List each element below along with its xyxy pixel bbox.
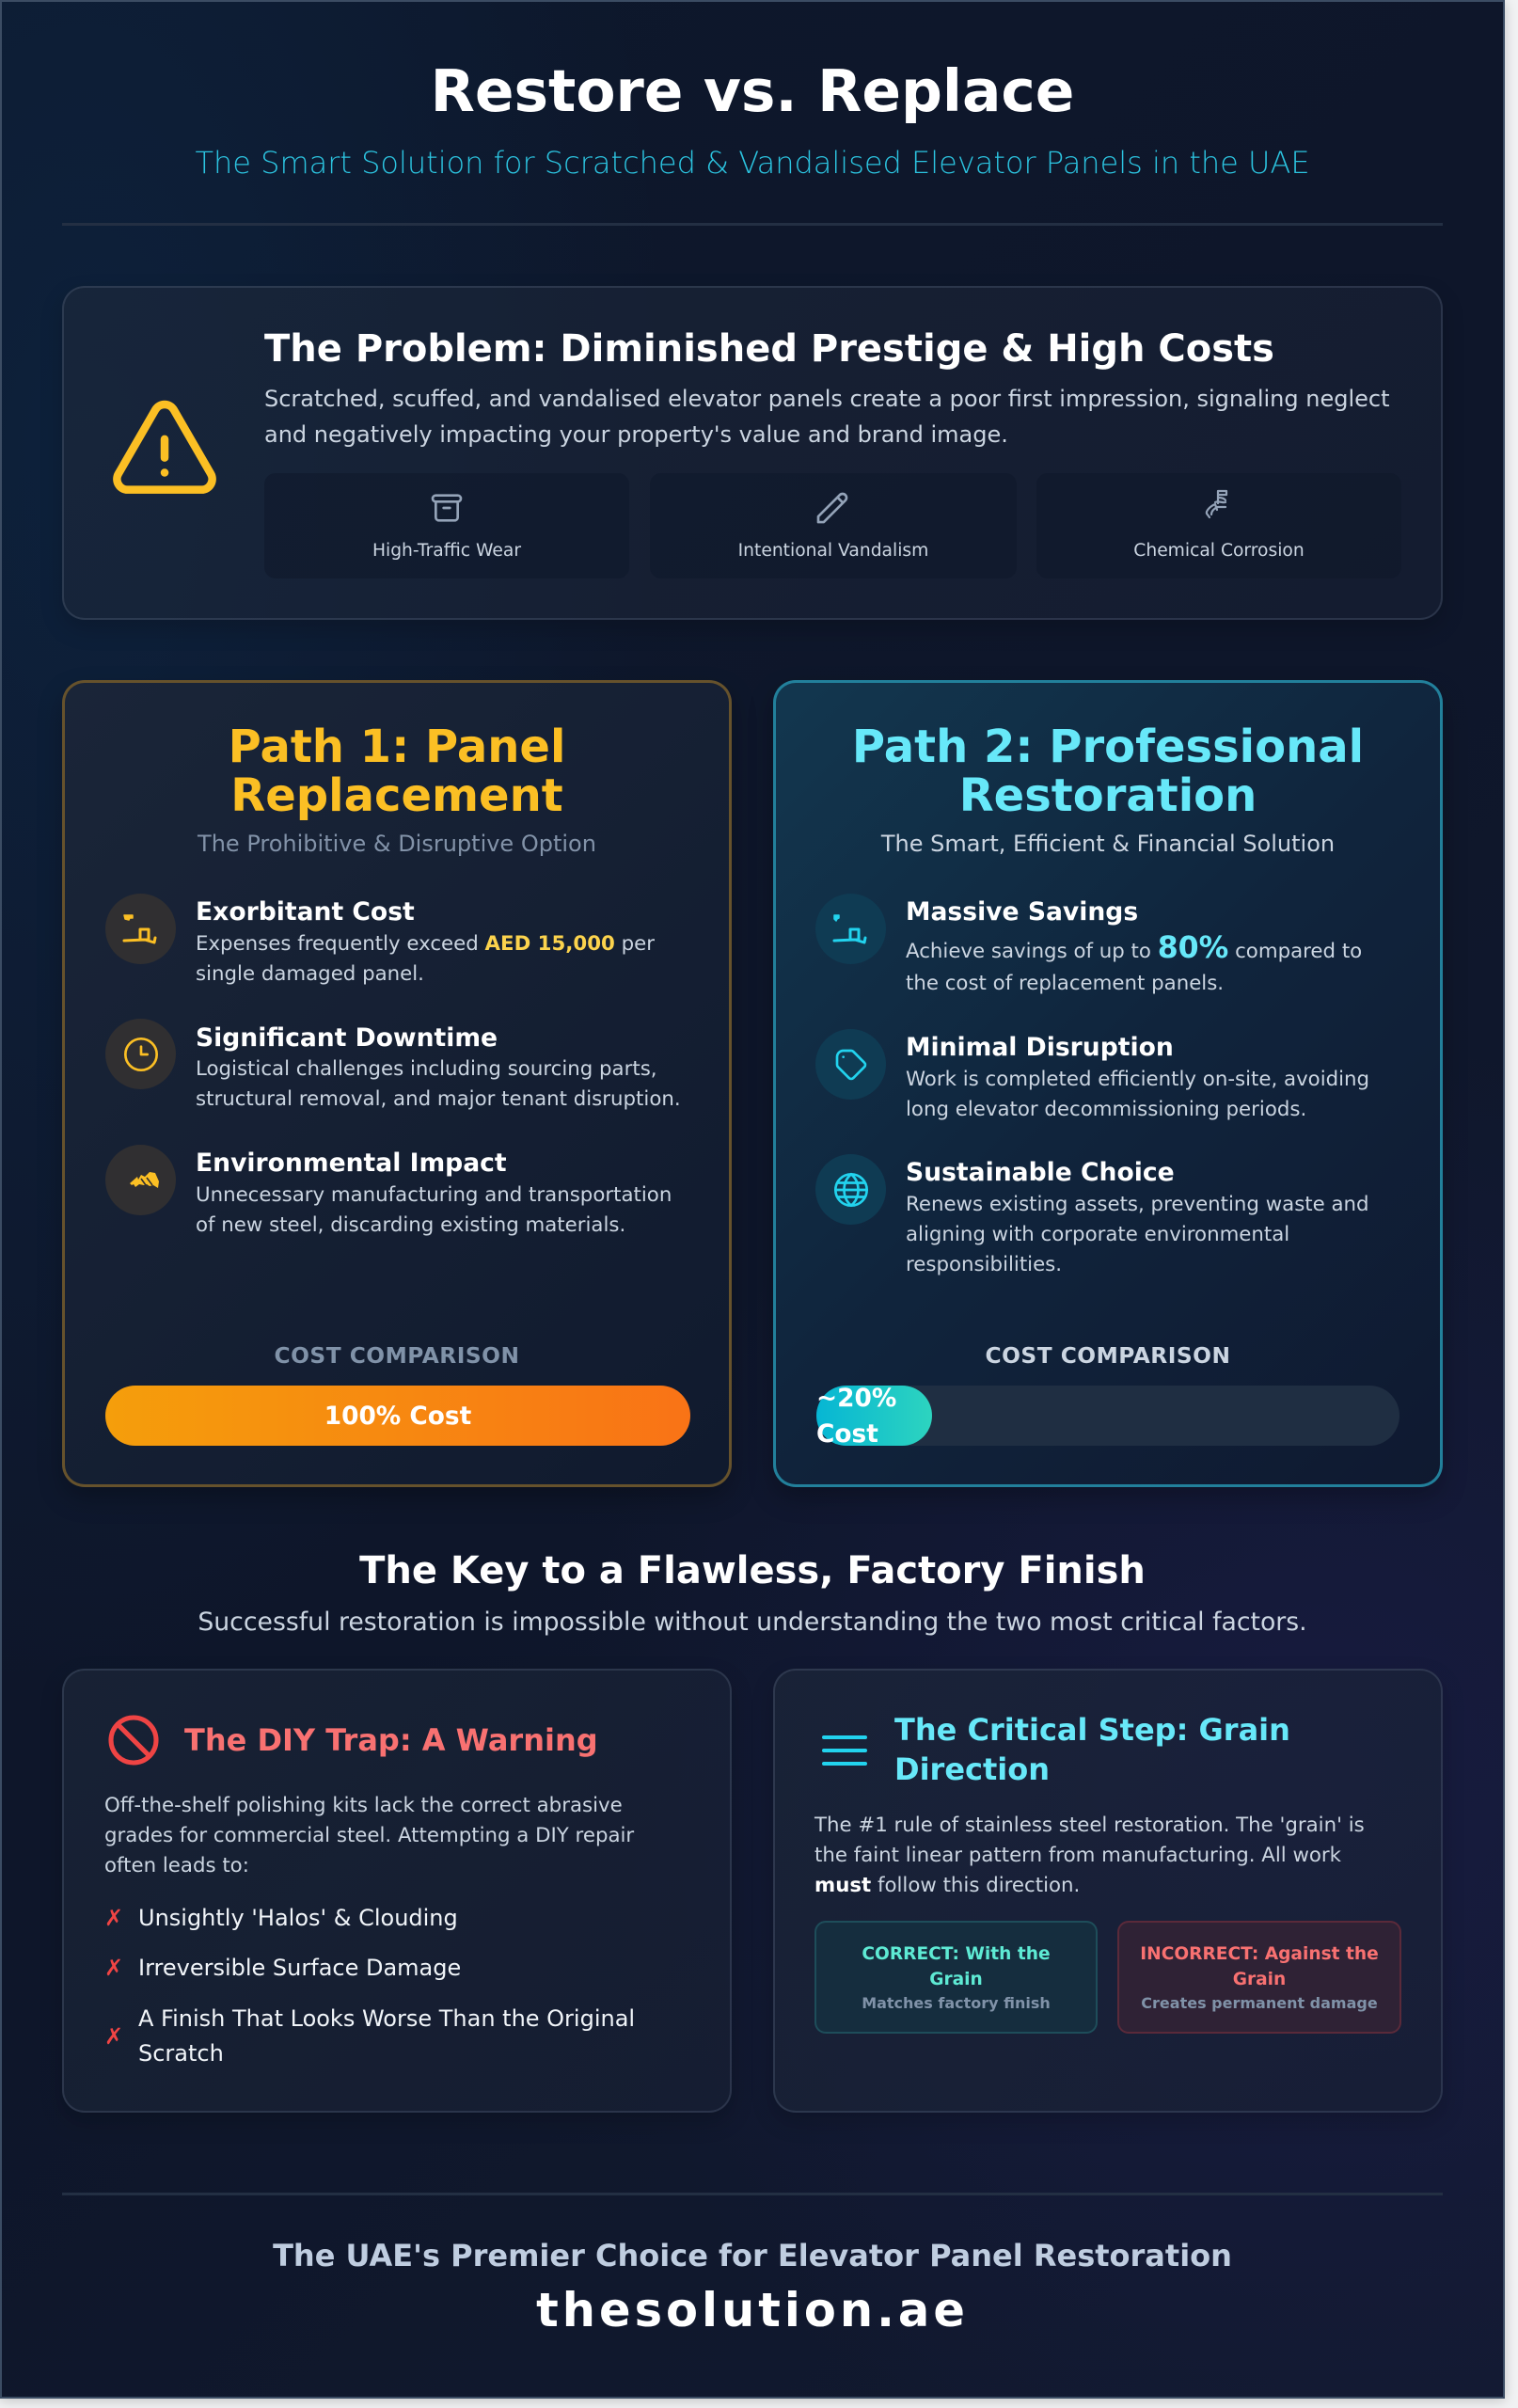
icon: tag [815, 1029, 886, 1100]
cost comparison label: COST COMPARISON [275, 1343, 519, 1369]
DIY description [104, 1794, 634, 1877]
grain heading: The Critical Step: Grain [894, 1712, 1290, 1748]
icon: savings [815, 894, 886, 964]
correct label: Grain [929, 1970, 983, 1988]
bar label: Cost [816, 1419, 878, 1449]
cross mark: ✗ [104, 2023, 123, 2050]
description [906, 931, 1362, 995]
title: Significant Downtime [196, 1023, 498, 1053]
description: the cost of replacement panels. [906, 972, 1224, 995]
icon: archive box [431, 494, 463, 522]
DIY description: often leads to: [104, 1854, 249, 1877]
description: Expenses frequently exceed AED 15,000 per [196, 932, 655, 956]
icon: globe [815, 1154, 886, 1225]
description: Logistical challenges including sourcing parts, [196, 1057, 657, 1081]
path 2 heading: Restoration [959, 769, 1257, 822]
description [196, 1057, 681, 1111]
chip: chemical corrosion [1036, 473, 1401, 578]
description [906, 1193, 1369, 1276]
bullet text: Scratch [138, 2040, 224, 2067]
title: Minimal Disruption [906, 1033, 1174, 1062]
path 2 heading: Path 2: Professional [852, 721, 1364, 773]
problem heading: The Problem: Diminished Prestige & High Costs [264, 327, 1274, 371]
panel: the problem [62, 286, 1443, 620]
path 2 heading [852, 721, 1364, 822]
incorrect label: Grain [1233, 1970, 1286, 1988]
description [196, 932, 655, 986]
icon: pencil [816, 493, 848, 523]
chip: high-traffic wear [264, 473, 629, 578]
description: Renews existing assets, preventing waste and [906, 1193, 1369, 1216]
bar label: ~20% [816, 1384, 896, 1413]
label: Chemical Corrosion [1133, 541, 1305, 561]
problem description [264, 386, 1389, 448]
bar: 100% cost: 100% Cost [324, 1402, 471, 1431]
DIY heading: The DIY Trap: A Warning [184, 1722, 598, 1758]
grain description: the faint linear pattern from manufacturing. All work [814, 1844, 1341, 1867]
footer brand: thesolution.ae [536, 2283, 969, 2337]
grain description: The #1 rule of stainless steel restoration. The 'grain' is [814, 1814, 1365, 1837]
title: Massive Savings [906, 897, 1138, 927]
grain description: must follow this direction. [814, 1874, 1080, 1897]
description: aligning with corporate environmental [906, 1223, 1289, 1246]
problem description: Scratched, scuffed, and vandalised elevator panels create a poor first impression, signaling neglect [264, 386, 1389, 412]
item: minimal disruption [815, 1029, 1369, 1121]
incorrect note: Creates permanent damage [1141, 1994, 1378, 2012]
grain heading: Direction [894, 1751, 1050, 1787]
problem description: and negatively impacting your property's value and brand image. [264, 421, 1008, 448]
footer tagline: The UAE's Premier Choice for Elevator Panel Restoration [273, 2238, 1232, 2273]
description: structural removal, and major tenant disruption. [196, 1087, 681, 1111]
section heading: The Key to a Flawless, Factory Finish [359, 1549, 1146, 1592]
subtitle: The Smart Solution for Scratched & Vandalised Elevator Panels in the UAE [195, 145, 1310, 181]
icon: ban [108, 1716, 159, 1765]
description: responsibilities. [906, 1253, 1062, 1276]
icon: clock [105, 1019, 176, 1089]
bar fill [816, 1386, 932, 1446]
incorrect label: INCORRECT: Against the [1140, 1944, 1379, 1964]
title: Restore vs. Replace [431, 58, 1074, 125]
description: Work is completed efficiently on-site, avoiding [906, 1068, 1369, 1091]
icon: environment [105, 1145, 176, 1215]
icon: cost [105, 894, 176, 964]
panel: path 1 replacement [62, 680, 732, 1487]
bullet: halos: ✗ [104, 1905, 123, 1931]
description [906, 1068, 1369, 1121]
panel: grain direction [773, 1669, 1443, 2113]
section subtitle: Successful restoration is impossible without understanding the two most critical factors. [198, 1608, 1307, 1637]
bar label [816, 1384, 896, 1449]
chip: intentional vandalism [650, 473, 1017, 578]
label: High-Traffic Wear [372, 541, 521, 561]
bullet: irreversible damage: ✗ [104, 1955, 123, 1981]
description: Achieve savings of up to 80% compared to [906, 931, 1362, 965]
bullet: irreversible damage: Irreversible Surface Damage [138, 1955, 461, 1981]
item: sustainable choice [815, 1154, 1369, 1276]
bullet: halos: Unsightly 'Halos' & Clouding [138, 1905, 458, 1931]
title: Environmental Impact [196, 1149, 507, 1178]
path 1 heading: Replacement [230, 769, 563, 822]
label: Intentional Vandalism [738, 541, 928, 561]
description: Unnecessary manufacturing and transportation [196, 1183, 672, 1207]
bullet list [104, 1905, 635, 2067]
grain description [814, 1814, 1365, 1897]
item: significant downtime [105, 1019, 681, 1111]
description: long elevator decommissioning periods. [906, 1098, 1306, 1121]
DIY description: Off-the-shelf polishing kits lack the correct abrasive [104, 1794, 623, 1817]
title: Exorbitant Cost [196, 897, 415, 927]
description: single damaged panel. [196, 962, 424, 986]
bar: 100% cost [105, 1386, 690, 1446]
icon: chemical flask [1206, 489, 1228, 519]
DIY description: grades for commercial steel. Attempting a DIY repair [104, 1824, 634, 1847]
bullet: worse finish [104, 2005, 635, 2067]
bullet text [138, 2005, 635, 2067]
path 1 subtitle: The Prohibitive & Disruptive Option [198, 831, 596, 857]
description [196, 1183, 672, 1237]
correct label: CORRECT: With the [862, 1944, 1051, 1964]
callout: incorrect [1117, 1921, 1401, 2034]
path 2 subtitle: The Smart, Efficient & Financial Solution [881, 831, 1335, 857]
correct label [862, 1944, 1051, 1988]
item: massive savings [815, 894, 1362, 995]
icon: grain lines [822, 1735, 867, 1766]
title: Sustainable Choice [906, 1158, 1175, 1187]
description: of new steel, discarding existing materials. [196, 1213, 625, 1237]
callout: correct [814, 1921, 1098, 2034]
bullet text: A Finish That Looks Worse Than the Original [138, 2005, 635, 2032]
path 1 heading: Path 1: Panel [229, 721, 565, 773]
bar: 20% cost [816, 1386, 1399, 1446]
panel: path 2 restoration [773, 680, 1443, 1487]
cost comparison label: COST COMPARISON [986, 1343, 1230, 1369]
panel: DIY trap [62, 1669, 732, 2113]
incorrect label [1140, 1944, 1379, 1988]
item: environmental impact [105, 1145, 672, 1237]
item: exorbitant cost [105, 894, 655, 986]
grain heading [894, 1712, 1290, 1787]
path 1 heading [229, 721, 565, 822]
icon: warning triangle [113, 401, 216, 494]
correct note: Matches factory finish [862, 1994, 1051, 2012]
